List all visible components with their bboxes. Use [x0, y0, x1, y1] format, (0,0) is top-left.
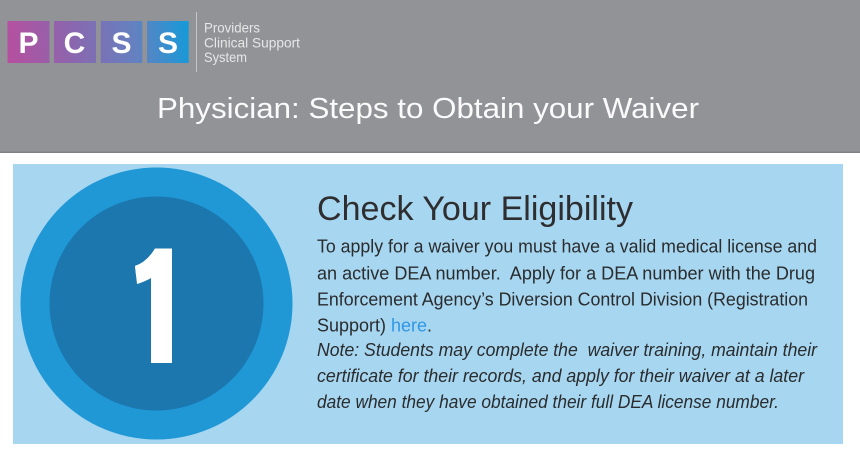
- logo wordmark: Clinical Support: [204, 34, 300, 50]
- logo wordmark: System: [204, 49, 247, 65]
- step number badge: [20, 168, 292, 440]
- logo tile: S: [147, 21, 189, 63]
- note text: date when they have obtained their full DEA license number.: [317, 392, 779, 412]
- header band: [0, 0, 860, 153]
- step heading: Check Your Eligibility: [317, 190, 633, 228]
- logo tile: C: [54, 21, 96, 63]
- step body text: Enforcement Agency’s Diversion Control Division (Registration: [317, 290, 808, 310]
- logo tile: S: S: [158, 27, 178, 60]
- logo tile: C: C: [64, 27, 85, 60]
- step body text: [317, 236, 817, 336]
- logo tile: P: [8, 21, 50, 63]
- step body text: an active DEA number. Apply for a DEA number with the Drug: [317, 264, 815, 284]
- step body text: To apply for a waiver you must have a valid medical license and: [317, 236, 817, 256]
- title: Physician: Steps to Obtain your Waiver: [157, 93, 699, 125]
- note text: [317, 340, 818, 412]
- step body text: Support) here.: [317, 316, 432, 336]
- note text: Note: Students may complete the waiver training, maintain their: [317, 340, 818, 360]
- logo tile: S: [101, 21, 142, 63]
- note text: certificate for their records, and apply for their waiver at a later: [317, 366, 805, 386]
- panel: step 1: [13, 164, 843, 444]
- logo tile: P: P: [18, 27, 39, 60]
- logo tile: S: S: [111, 27, 132, 60]
- step number badge: 1: [109, 214, 201, 399]
- logo wordmark: [204, 20, 300, 65]
- logo wordmark: Providers: [204, 20, 260, 36]
- logo: PCSS: [8, 12, 300, 72]
